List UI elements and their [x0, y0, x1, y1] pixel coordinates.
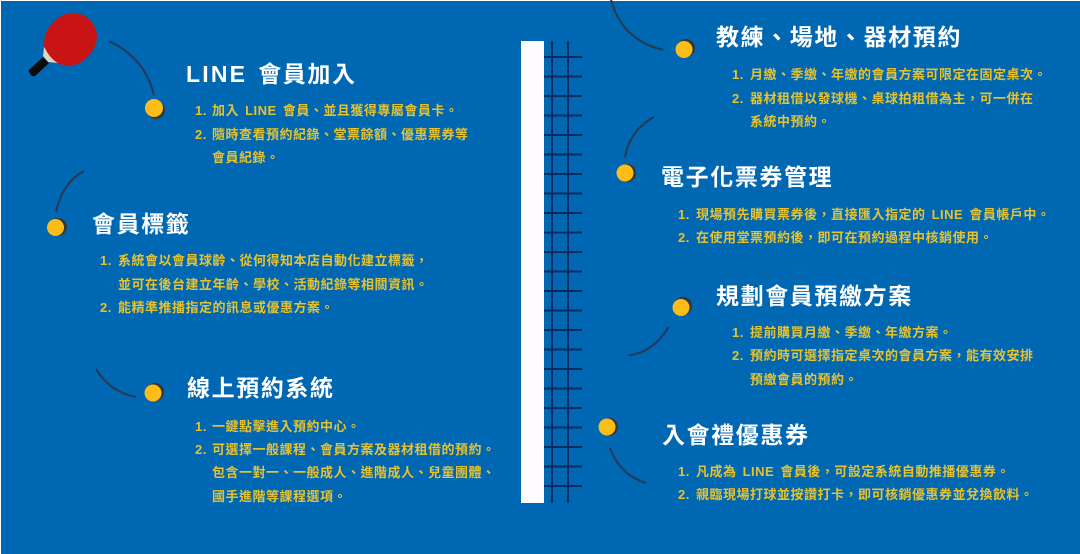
- text: 2.: [732, 91, 744, 106]
- icon: ball 3: [144, 383, 164, 402]
- heading: 規劃會員預繳方案: 規劃會員預繳方案: [716, 283, 913, 309]
- text: 凡成為 LINE 會員後，可設定系統自動推播優惠券。: [696, 464, 1010, 479]
- text: 系統會以會員球齡、從何得知本店自動化建立標籤，: [118, 253, 429, 268]
- arc: ball path 5: [625, 117, 654, 157]
- text block: 線上預約系統: [195, 419, 496, 504]
- icon: ball 6: [672, 297, 692, 316]
- text: 2.: [195, 127, 207, 142]
- arc: ball path 4: [611, 0, 663, 50]
- icon: ball 1: [145, 99, 165, 119]
- table tennis net: [521, 41, 582, 503]
- text: 2.: [195, 442, 207, 457]
- arc: ball path 1: [109, 41, 154, 95]
- text: 可選擇一般課程、會員方案及器材租借的預約。: [212, 442, 496, 457]
- text: 1.: [100, 253, 112, 268]
- text: 提前購買月繳、季繳、年繳方案。: [750, 325, 953, 340]
- text: 現場預先購買票券後，直接匯入指定的 LINE 會員帳戶中。: [696, 207, 1050, 222]
- text: 會員紀錄。: [212, 150, 280, 165]
- text: 1.: [732, 325, 744, 340]
- icon: ball 7: [598, 418, 618, 436]
- text: 包含一對一、一般成人、進階成人、兒童團體、: [212, 465, 496, 480]
- arc: ball path 7: [610, 448, 646, 483]
- text block: LINE 會員加入: [195, 103, 469, 165]
- text: 2.: [678, 487, 690, 502]
- text block: 電子化票券管理: [678, 207, 1050, 245]
- text: 隨時查看預約紀錄、堂票餘額、優惠票券等: [212, 127, 469, 142]
- text: 國手進階等課程選項。: [212, 489, 347, 504]
- text: 並可在後台建立年齡、學校、活動紀錄等相關資訊。: [118, 277, 429, 292]
- text block: 規劃會員預繳方案: [732, 325, 1034, 387]
- text: 系統中預約。: [750, 114, 831, 129]
- heading: 教練、場地、器材預約: 教練、場地、器材預約: [716, 24, 962, 50]
- text: 1.: [195, 419, 207, 434]
- text: 1.: [678, 207, 690, 222]
- text: 2.: [732, 348, 744, 363]
- heading: 會員標籤: 會員標籤: [92, 211, 190, 237]
- text: 一鍵點擊進入預約中心。: [212, 419, 361, 434]
- text block: 教練、場地、器材預約: [732, 67, 1047, 129]
- text: 1.: [678, 464, 690, 479]
- text: 月繳、季繳、年繳的會員方案可限定在固定桌次。: [750, 67, 1047, 82]
- icon: ball 2: [47, 218, 67, 236]
- arc: ball path 2: [56, 171, 84, 212]
- arc: ball path 6: [628, 327, 668, 356]
- text: 預繳會員的預約。: [750, 372, 858, 387]
- heading: 線上預約系統: 線上預約系統: [187, 375, 335, 401]
- icon: ball 5: [616, 164, 636, 182]
- text: 2.: [678, 230, 690, 245]
- arc: ball path 3: [96, 369, 136, 397]
- text: 親臨現場打球並按讚打卡，即可核銷優惠券並兌換飲料。: [696, 487, 1034, 502]
- text: 器材租借以發球機、桌球拍租借為主，可一併在: [750, 91, 1034, 106]
- heading: 電子化票券管理: 電子化票券管理: [661, 164, 833, 190]
- text: 在使用堂票預約後，即可在預約過程中核銷使用。: [696, 230, 993, 245]
- text block: 入會禮優惠券: [678, 464, 1034, 502]
- heading: 入會禮優惠券: 入會禮優惠券: [662, 422, 810, 448]
- text: 2.: [100, 300, 112, 315]
- icon: table tennis paddle: [29, 13, 97, 76]
- text: 能精準推播指定的訊息或優惠方案。: [118, 300, 334, 315]
- text: 1.: [732, 67, 744, 82]
- text: 1.: [195, 103, 207, 118]
- text: 預約時可選擇指定桌次的會員方案，能有效安排: [750, 348, 1034, 363]
- text: 加入 LINE 會員、並且獲得專屬會員卡。: [212, 103, 458, 118]
- text block: 會員標籤: [100, 253, 429, 315]
- heading: LINE 會員加入: LINE 會員加入: [186, 61, 357, 87]
- icon: ball 4: [676, 39, 695, 58]
